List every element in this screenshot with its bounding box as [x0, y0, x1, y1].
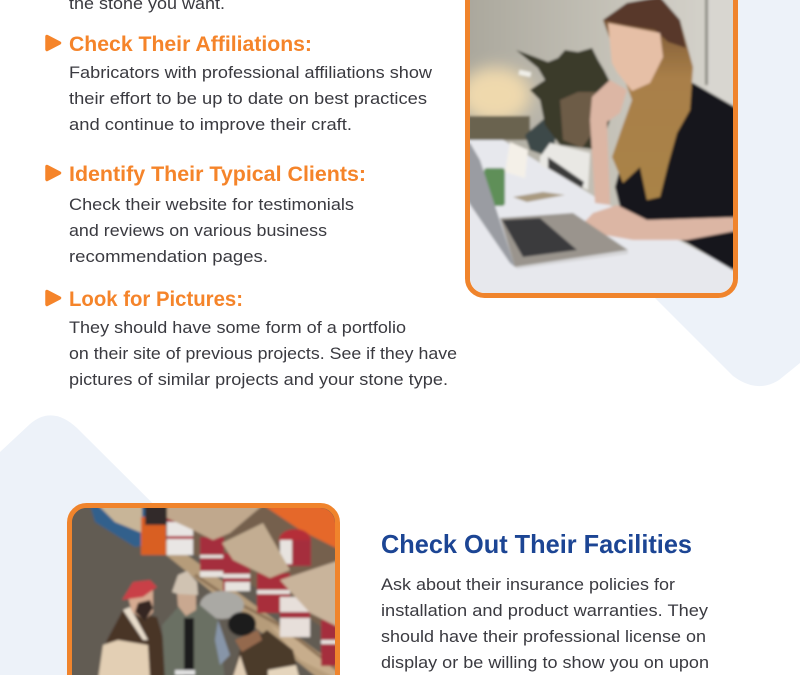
text block: clients: [69, 196, 354, 266]
icon: arrow bullet: [47, 166, 60, 180]
text block: facilities: installation and product warranties. They: [381, 602, 709, 620]
hair: [603, 0, 693, 200]
text block: affiliations: Fabricators with professional affiliations show: [69, 64, 432, 82]
text block: pictures: They should have some form of a portfolio: [69, 319, 406, 337]
chair: [540, 143, 590, 190]
text block: facilities: display or be willing to show you on upon: [381, 654, 709, 672]
worker middle: [162, 605, 225, 675]
hand and arm: [590, 80, 627, 205]
section: identify their typical clients: [47, 163, 366, 266]
text block: facilities: should have their professional license on: [381, 628, 706, 646]
text block: affiliations: [69, 64, 432, 134]
glass: [484, 168, 505, 206]
text block: affiliations: and continue to improve their craft.: [69, 116, 352, 134]
text block: affiliations: their effort to be up to date on best practices: [69, 90, 427, 108]
phone: [513, 192, 565, 202]
text block: clients: recommendation pages.: [69, 248, 268, 266]
light floor patch: [200, 591, 244, 619]
text block: facilities: Ask about their insurance policies for: [381, 576, 676, 594]
text block: clients: Check their website for testimonials: [69, 196, 354, 214]
text block: pictures: [69, 319, 457, 389]
background shape: upper right: [640, 0, 800, 386]
pallets: [160, 540, 340, 675]
heading: clients: Identify Their Typical Clients:: [69, 163, 366, 186]
background shape: lower left: [0, 415, 325, 675]
photo: workers in warehouse: [68, 505, 340, 675]
cardboard tops: [167, 505, 263, 540]
photo: woman at laptop: [459, 0, 740, 300]
shirt: [615, 83, 740, 270]
section: check their affiliations: [47, 33, 432, 134]
face: [608, 23, 663, 91]
orange shelf: [264, 508, 335, 550]
worker left: [106, 610, 166, 675]
table: [465, 140, 740, 300]
text block: pictures: pictures of similar projects and your stone type.: [69, 371, 448, 389]
heading: affiliations: Check Their Affiliations:: [69, 33, 312, 56]
section: look for pictures: [47, 288, 457, 389]
worker right: [238, 629, 297, 675]
heading: check out their facilities: Check Out Their Facilities: [381, 529, 692, 559]
paint buckets: [167, 517, 337, 666]
icon: arrow bullet: [47, 292, 60, 304]
text block: pictures: on their site of previous projects. See if they have: [69, 345, 457, 363]
icon: arrow bullet: [47, 36, 60, 50]
blue pallet: [90, 505, 145, 547]
heading: pictures: Look for Pictures:: [69, 288, 243, 311]
laptop: [465, 143, 515, 267]
text block: clients: and reviews on various business: [69, 222, 327, 240]
text block: facilities: [381, 576, 709, 672]
aisle shade behind buckets: [194, 508, 335, 626]
